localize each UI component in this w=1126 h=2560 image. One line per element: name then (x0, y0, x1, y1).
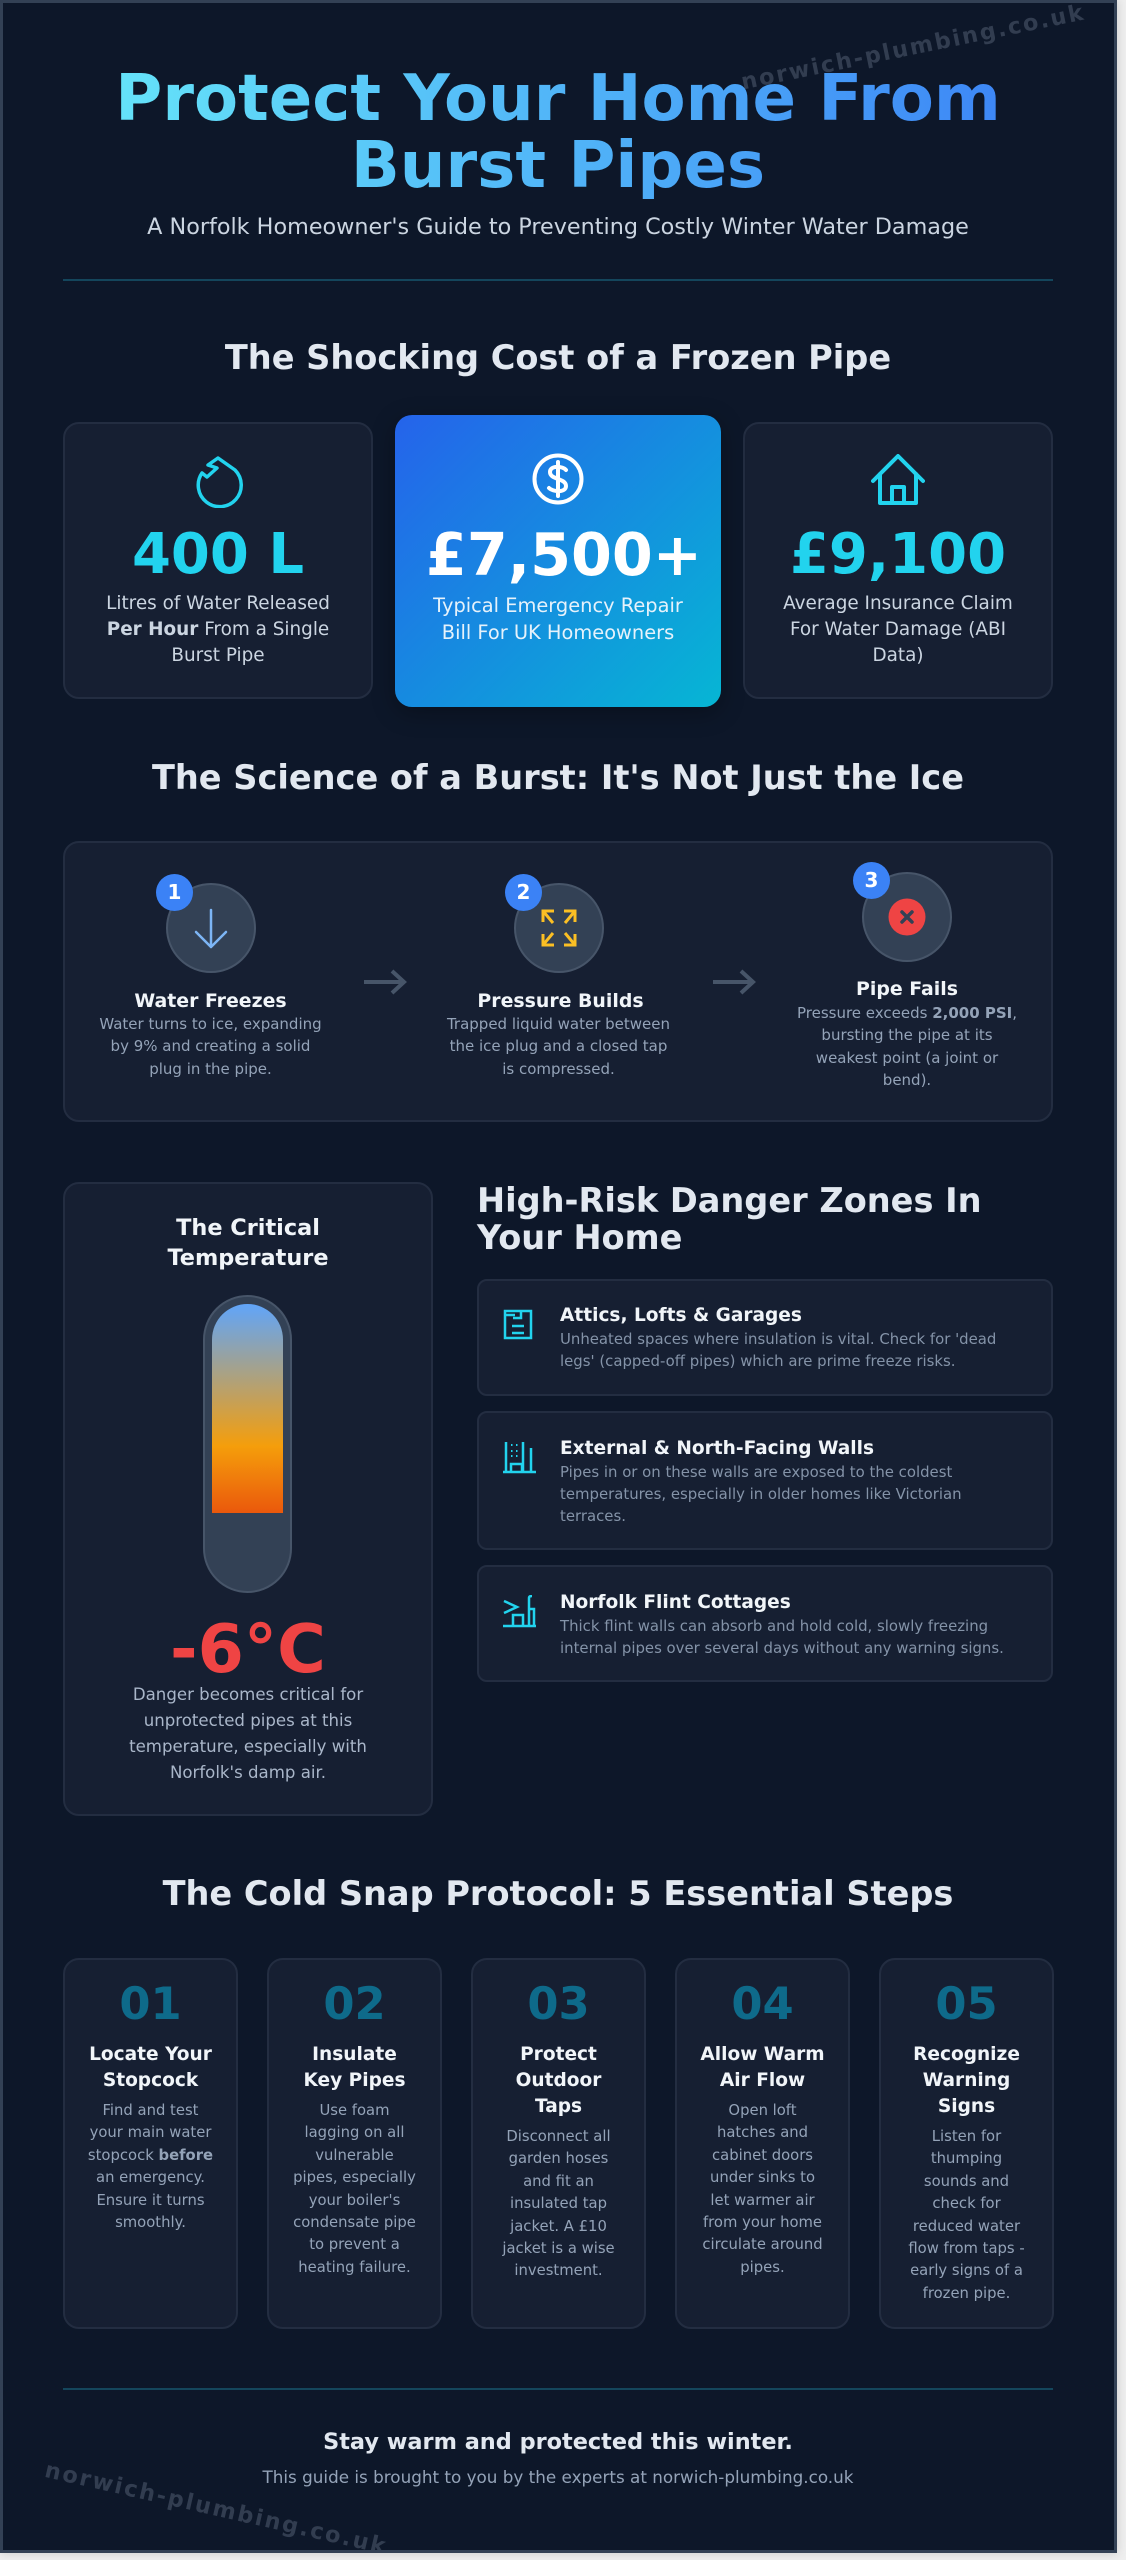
watermark: top: norwich-plumbing.co.uk (739, 0, 1087, 95)
step title (913, 2044, 1020, 2117)
step text: to prevent a (309, 2236, 400, 2253)
subtitle: A Norfolk Homeowner's Guide to Preventing Costly Winter Water Damage (147, 214, 969, 240)
step 3 text (797, 1004, 1017, 1089)
step text: insulated tap (510, 2195, 607, 2212)
step text: cabinet doors (712, 2147, 813, 2164)
step text: garden hoses (509, 2150, 608, 2167)
panel: stat £7,500+ (395, 415, 721, 707)
step 3 badge (853, 862, 890, 899)
arrow 2 (713, 970, 756, 994)
step text: reduced water (913, 2218, 1020, 2235)
step text: heating failure. (298, 2259, 411, 2276)
step text: smoothly. (115, 2214, 186, 2231)
step text (502, 2128, 615, 2279)
step title: Stopcock (103, 2070, 198, 2091)
panel: critical temperature (63, 1182, 433, 1816)
step text: pipes, especially (293, 2169, 416, 2186)
heading: danger zones: Your Home (477, 1218, 682, 1257)
step text: condensate pipe (293, 2214, 416, 2231)
footer heading: Stay warm and protected this winter. (323, 2429, 793, 2455)
stat label (783, 593, 1013, 666)
step 1 text: by 9% and creating a solid (111, 1037, 310, 1055)
step text (88, 2102, 213, 2231)
zone text: Pipes in or on these walls are exposed to the coldest (560, 1463, 952, 1481)
step text: Listen for (932, 2128, 1001, 2145)
step title: Protect (520, 2044, 597, 2065)
step 3 badge: 3 (865, 868, 878, 892)
step 1 text: plug in the pipe. (149, 1060, 272, 1078)
step text: Disconnect all (506, 2128, 611, 2145)
step 2 badge: 2 (517, 880, 530, 904)
heading: danger zones (476, 1181, 982, 1257)
step 3 text: bend). (883, 1071, 931, 1089)
thermometer fill (212, 1304, 283, 1513)
step title: Locate Your (89, 2044, 212, 2065)
icon: attic (504, 1310, 532, 1340)
panel: protocol step 5 (879, 1958, 1054, 2329)
step title: Outdoor (516, 2070, 601, 2091)
step text: Find and test (102, 2102, 198, 2119)
step 2 badge (505, 874, 542, 911)
title: Protect Your Home From (115, 61, 1001, 136)
step text: and fit an (523, 2173, 594, 2190)
step 3 text: Pressure exceeds 2,000 PSI, (797, 1004, 1017, 1022)
stat label (433, 594, 683, 644)
panel heading: Temperature (167, 1245, 329, 1271)
step text: thumping (931, 2150, 1002, 2167)
step text: jacket is a wise (502, 2240, 615, 2257)
step text: investment. (514, 2262, 603, 2279)
step number: 01 (119, 1977, 182, 2030)
step 3 circle icon (862, 872, 952, 962)
temperature value: -6°C (170, 1610, 326, 1688)
panel: attics (477, 1279, 1053, 1396)
zone text (560, 1330, 996, 1370)
zone title: External & North-Facing Walls (560, 1438, 874, 1459)
panel heading: The Critical (176, 1215, 320, 1241)
icon: dollar (532, 454, 584, 504)
zone text: Thick flint walls can absorb and hold cold, slowly freezing (560, 1617, 988, 1635)
step text: sounds and (924, 2173, 1009, 2190)
step 1 text: Water turns to ice, expanding (99, 1015, 322, 1033)
steps of a burst (99, 862, 1017, 1089)
step 3 text: bursting the pipe at its (821, 1026, 993, 1044)
step title: Recognize (913, 2044, 1020, 2065)
step title (303, 2044, 406, 2091)
step text: check for (932, 2195, 1001, 2212)
step 2 circle icon (514, 883, 604, 973)
temperature text: Norfolk's damp air. (170, 1763, 326, 1782)
step number: 05 (935, 1977, 998, 2030)
step text: pipes. (740, 2259, 785, 2276)
zone text: Unheated spaces where insulation is vital. Check for 'dead (560, 1330, 996, 1348)
stat label: Data) (872, 645, 924, 666)
step 3 text: weakest point (a joint or (816, 1049, 998, 1067)
step 2 title: Pressure Builds (477, 990, 644, 1012)
thermometer (203, 1295, 292, 1593)
step 3 title: Pipe Fails (856, 978, 958, 1000)
stat value: £7,500+ (426, 520, 702, 589)
panel: science of a burst (63, 841, 1053, 1122)
step text: stopcock before (88, 2147, 213, 2164)
step 2 text: is compressed. (502, 1060, 615, 1078)
stat value: 400 L (132, 522, 304, 587)
step text: hatches and (717, 2124, 808, 2141)
step text: your boiler's (309, 2192, 400, 2209)
heading: science: The Science of a Burst: It's Not Just the Ice (152, 758, 964, 797)
heading: cost: The Shocking Cost of a Frozen Pipe (225, 338, 891, 377)
step title: Air Flow (720, 2070, 805, 2091)
zone text: terraces. (560, 1507, 626, 1525)
step title: Taps (535, 2096, 582, 2117)
panel: stat 400 L (63, 422, 373, 699)
step text: flow from taps - (908, 2240, 1025, 2257)
stat label: Per Hour From a Single (107, 619, 329, 640)
step text: an emergency. (96, 2169, 205, 2186)
step text: jacket. A £10 (510, 2218, 607, 2235)
stat label: Typical Emergency Repair (433, 594, 683, 617)
step text: Use foam (319, 2102, 390, 2119)
step text: vulnerable (315, 2147, 394, 2164)
panel: protocol step 1 (63, 1958, 238, 2329)
zone title: Attics, Lofts & Garages (560, 1305, 802, 1326)
step 1 badge: 1 (168, 880, 181, 904)
step 1 badge (156, 874, 193, 911)
step 2 text: Trapped liquid water between (447, 1015, 670, 1033)
stat label: Burst Pipe (171, 645, 265, 666)
step text: Open loft (728, 2102, 797, 2119)
step 1 text (99, 1015, 322, 1078)
stat label: For Water Damage (ABI (790, 619, 1006, 640)
footer divider (63, 2388, 1053, 2390)
icon: burst pipe (196, 456, 243, 508)
temperature text (129, 1685, 367, 1782)
step title (89, 2044, 212, 2091)
stat label: Litres of Water Released (106, 593, 330, 614)
step number: 03 (527, 1977, 590, 2030)
step title: Key Pipes (303, 2070, 406, 2091)
header divider (63, 279, 1053, 281)
step title: Signs (938, 2096, 995, 2117)
temperature text: unprotected pipes at this (144, 1711, 352, 1730)
temperature text: Danger becomes critical for (133, 1685, 363, 1704)
step text: lagging on all (304, 2124, 404, 2141)
step text: Ensure it turns (96, 2192, 205, 2209)
step text (293, 2102, 416, 2276)
zone title: Norfolk Flint Cottages (560, 1592, 791, 1613)
step text: let warmer air (710, 2192, 815, 2209)
stat label: Average Insurance Claim (783, 593, 1013, 614)
zone text (560, 1617, 1004, 1657)
icon: cottage (503, 1595, 536, 1628)
step text (702, 2102, 823, 2276)
panel: external walls (477, 1411, 1053, 1550)
arrow 1 (364, 970, 407, 994)
step title: Insulate (312, 2044, 397, 2065)
step text: your main water (90, 2124, 211, 2141)
zone text (560, 1463, 962, 1525)
icon: house (871, 454, 925, 505)
step 1 title: Water Freezes (134, 990, 287, 1012)
step title (700, 2044, 825, 2091)
step text: circulate around (702, 2236, 823, 2253)
panel: flint cottages (477, 1565, 1053, 1682)
zone text: internal pipes over several days without any warning signs. (560, 1639, 1004, 1657)
stat value: £9,100 (790, 522, 1006, 587)
title (63, 65, 1053, 199)
zone text: legs' (capped-off pipes) which are prime freeze risks. (560, 1352, 955, 1370)
step text (908, 2128, 1025, 2302)
stat label: Bill For UK Homeowners (442, 620, 674, 644)
title: Burst Pipes (351, 128, 765, 203)
step text: under sinks to (710, 2169, 815, 2186)
footer credit: This guide is brought to you by the experts at norwich-plumbing.co.uk (262, 2467, 853, 2487)
step title: Warning (923, 2070, 1010, 2091)
step 2 text (446, 1015, 670, 1078)
temperature text: temperature, especially with (129, 1737, 367, 1756)
step 1 circle icon (166, 883, 256, 973)
step text: from your home (703, 2214, 822, 2231)
step text: early signs of a (910, 2262, 1023, 2279)
stat label (106, 593, 330, 666)
heading: protocol: The Cold Snap Protocol: 5 Essential Steps (163, 1874, 953, 1913)
step title: Allow Warm (700, 2044, 825, 2065)
step title (516, 2044, 602, 2117)
panel: protocol step 2 (267, 1958, 442, 2329)
step number: 02 (323, 1977, 386, 2030)
step text: frozen pipe. (923, 2285, 1010, 2302)
zone text: temperatures, especially in older homes like Victorian (560, 1485, 962, 1503)
step 2 text: the ice plug and a closed tap (450, 1037, 667, 1055)
panel: stat £9,100 (743, 422, 1053, 699)
panel heading (167, 1215, 329, 1271)
panel: protocol step 4 (675, 1958, 850, 2329)
panel: protocol step 3 (471, 1958, 646, 2329)
heading: danger zones: High-Risk Danger Zones In (477, 1181, 982, 1220)
icon: walls (503, 1442, 536, 1474)
step number: 04 (731, 1977, 794, 2030)
